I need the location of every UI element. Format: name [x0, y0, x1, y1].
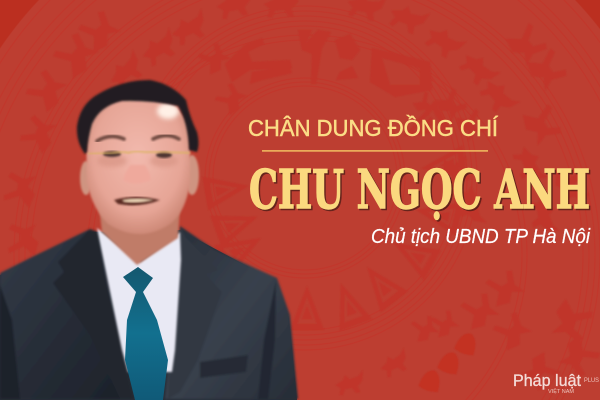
neck [99, 205, 180, 265]
face [86, 97, 190, 234]
subtitle: Chủ tịch UBND TP Hà Nội: Chủ tịch UBND TP Hà Nội [371, 226, 591, 248]
logo: Pháp luật Plus Việt Nam: VIỆT NAM [548, 387, 574, 395]
pattern: inner scene band [196, 30, 489, 396]
eyes [103, 151, 172, 158]
smile [114, 197, 160, 205]
pattern: dome motifs [418, 330, 480, 394]
logo: Pháp luật Plus Việt Nam [513, 371, 599, 395]
tie [123, 267, 168, 400]
jacket [0, 226, 298, 399]
shirt [97, 228, 181, 372]
divider line [262, 150, 488, 152]
logo: Pháp luật Plus Việt Nam: PLUS [584, 378, 599, 384]
hair [77, 80, 198, 154]
ears [80, 155, 199, 195]
nose [124, 165, 151, 184]
eye sockets [97, 155, 178, 167]
teeth [122, 198, 154, 203]
forehead highlight [157, 103, 179, 119]
brows [97, 136, 179, 141]
pattern: star triangles [202, 101, 467, 331]
jacket base [0, 230, 297, 400]
portrait: man in suit [0, 80, 298, 400]
heading: CHÂN DUNG ĐỒNG CHÍ: CHÂN DUNG ĐỒNG CHÍ [248, 114, 499, 141]
logo: Pháp luật Plus Việt Nam: Pháp luật [513, 371, 581, 390]
glasses [88, 151, 190, 154]
